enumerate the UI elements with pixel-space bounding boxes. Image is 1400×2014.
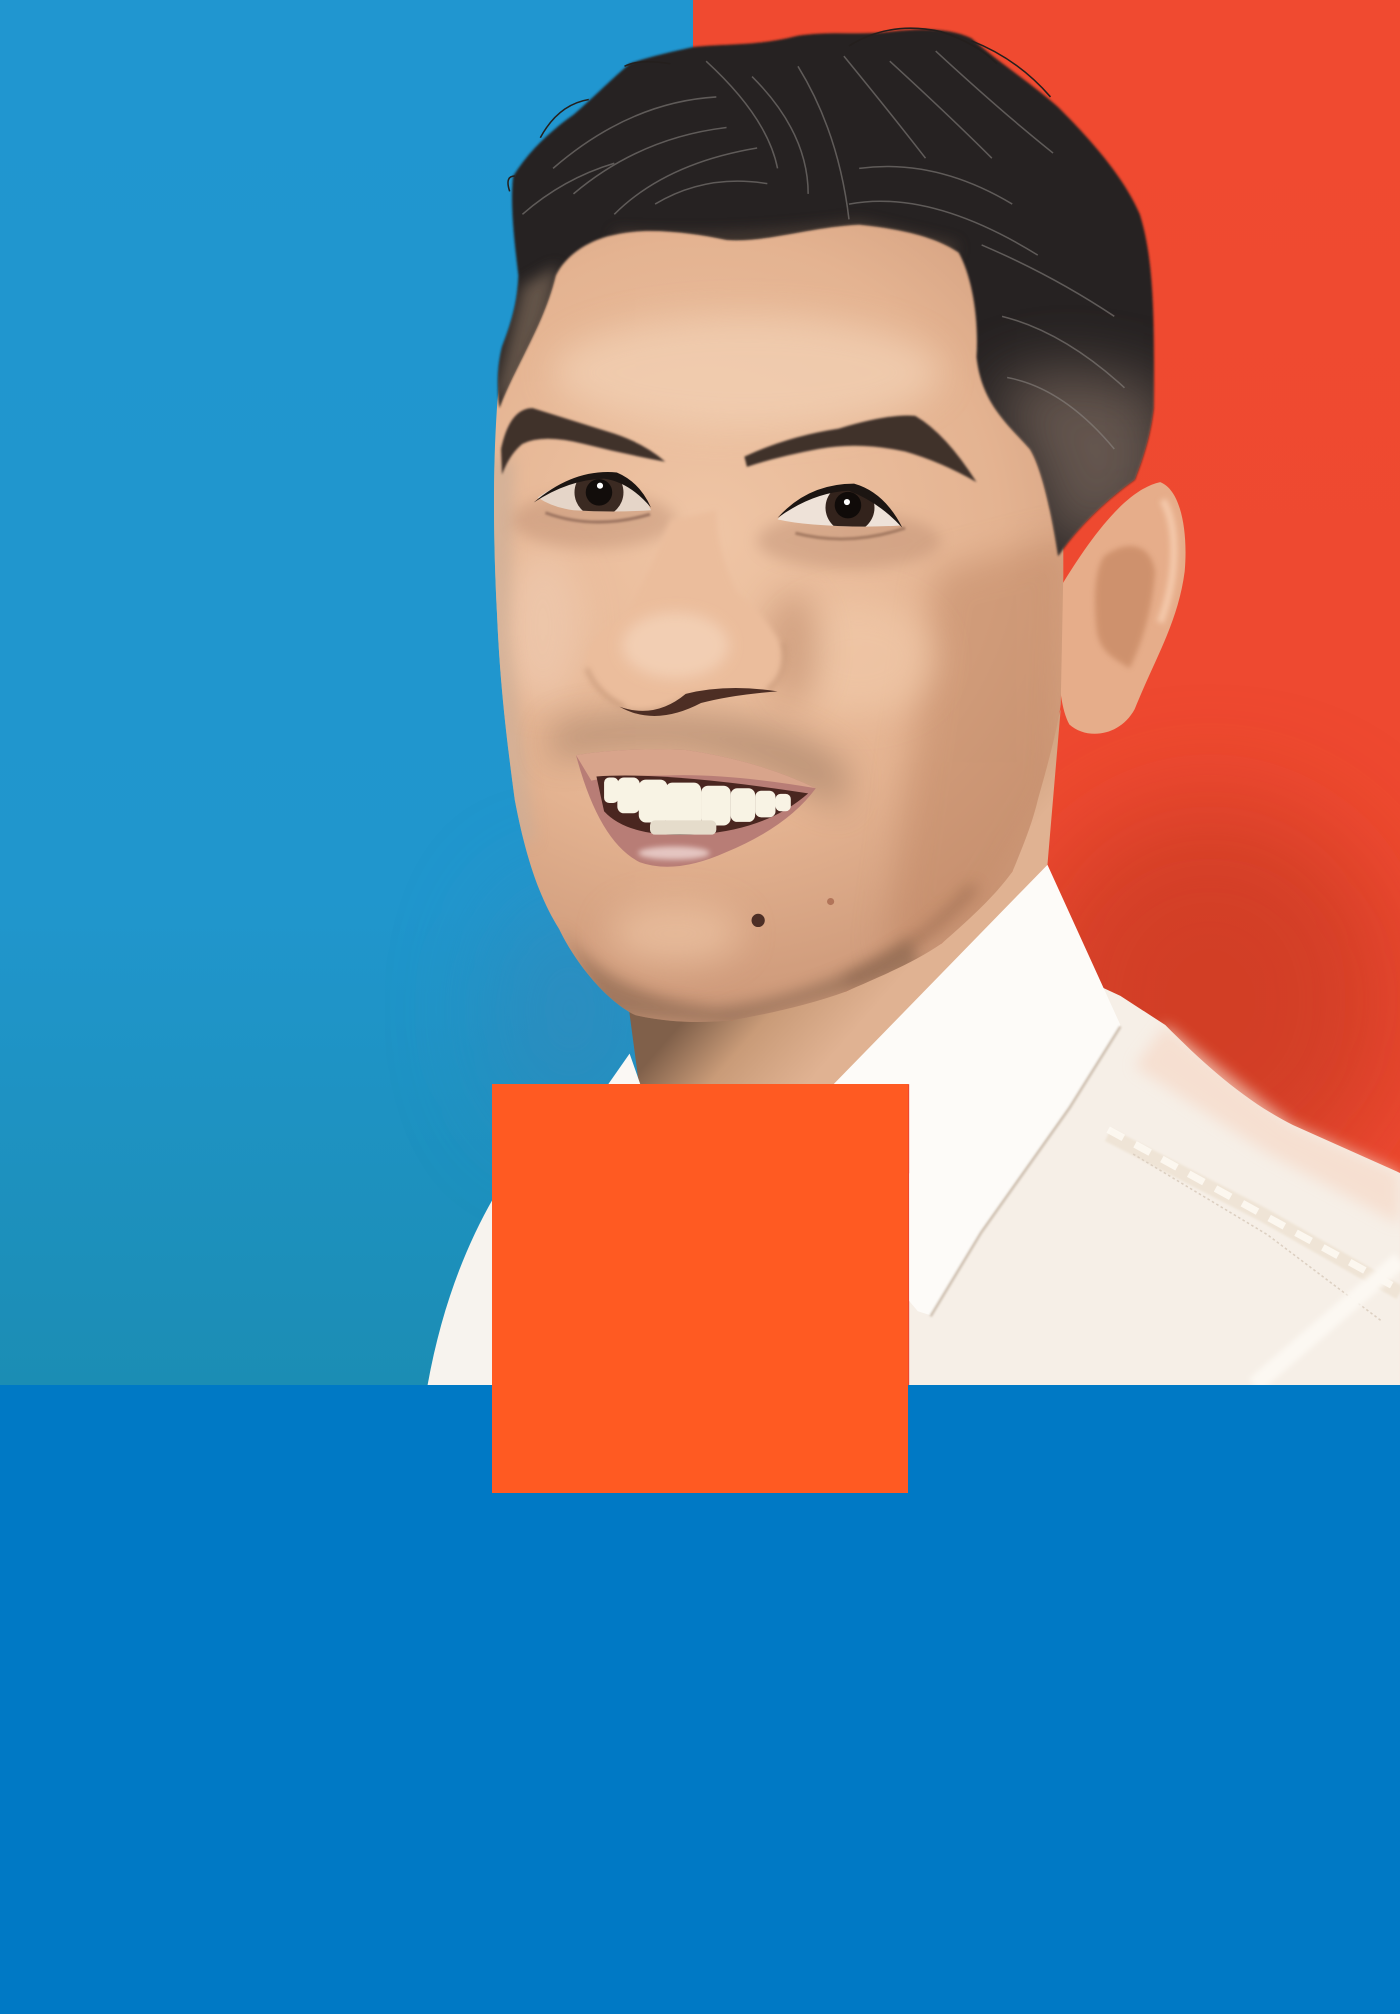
background: blue panel xyxy=(0,0,693,1385)
nose xyxy=(586,510,784,716)
hair highlights xyxy=(522,51,1124,449)
lip highlight xyxy=(638,846,710,860)
left cheek xyxy=(502,551,584,704)
hair fade left xyxy=(492,265,558,408)
stray hair strands xyxy=(508,28,1051,191)
background: dark red shade behind shoulder xyxy=(1020,800,1400,1200)
left edge pale xyxy=(494,458,532,843)
left eye xyxy=(534,468,651,522)
moustache stubble xyxy=(548,713,849,811)
shirt: body xyxy=(909,969,1400,1385)
shirt: collar xyxy=(834,865,1120,1316)
nose side shade xyxy=(767,592,818,704)
teeth xyxy=(604,778,791,835)
background: soft blue shade beside neck xyxy=(500,890,640,1130)
background: red panel xyxy=(693,0,1400,1385)
eye socket shade left xyxy=(512,492,676,548)
hair fade right xyxy=(987,367,1165,561)
small spot xyxy=(827,898,834,905)
forehead highlight xyxy=(553,316,941,429)
shirt: shoulder seam xyxy=(1108,1130,1400,1321)
left eyebrow xyxy=(501,408,665,474)
eye socket shade right xyxy=(757,513,941,569)
bottom blue band xyxy=(0,1385,1400,2014)
right eye xyxy=(778,483,905,539)
hairline soft xyxy=(614,227,956,250)
shirt: shoulder tint xyxy=(1135,1025,1400,1224)
right eyebrow xyxy=(744,415,977,482)
right cheek shading xyxy=(890,538,1063,937)
jaw crease shading xyxy=(846,886,974,982)
orange square xyxy=(492,1084,908,1493)
shirt: left shoulder xyxy=(428,1200,492,1385)
hair xyxy=(492,28,1165,561)
mole xyxy=(752,914,765,927)
right cheek highlight xyxy=(814,614,940,708)
shirt: small collar piece xyxy=(607,1054,641,1086)
chin stubble xyxy=(565,936,922,1022)
chin centre highlight xyxy=(609,903,742,964)
neck xyxy=(629,709,1061,1087)
ear xyxy=(1058,482,1186,734)
mouth xyxy=(576,749,816,867)
portrait photo illustration xyxy=(428,28,1400,1385)
poster artwork xyxy=(0,0,1400,1493)
face xyxy=(487,214,1073,1026)
shirt: cuff fold xyxy=(1255,1260,1400,1385)
